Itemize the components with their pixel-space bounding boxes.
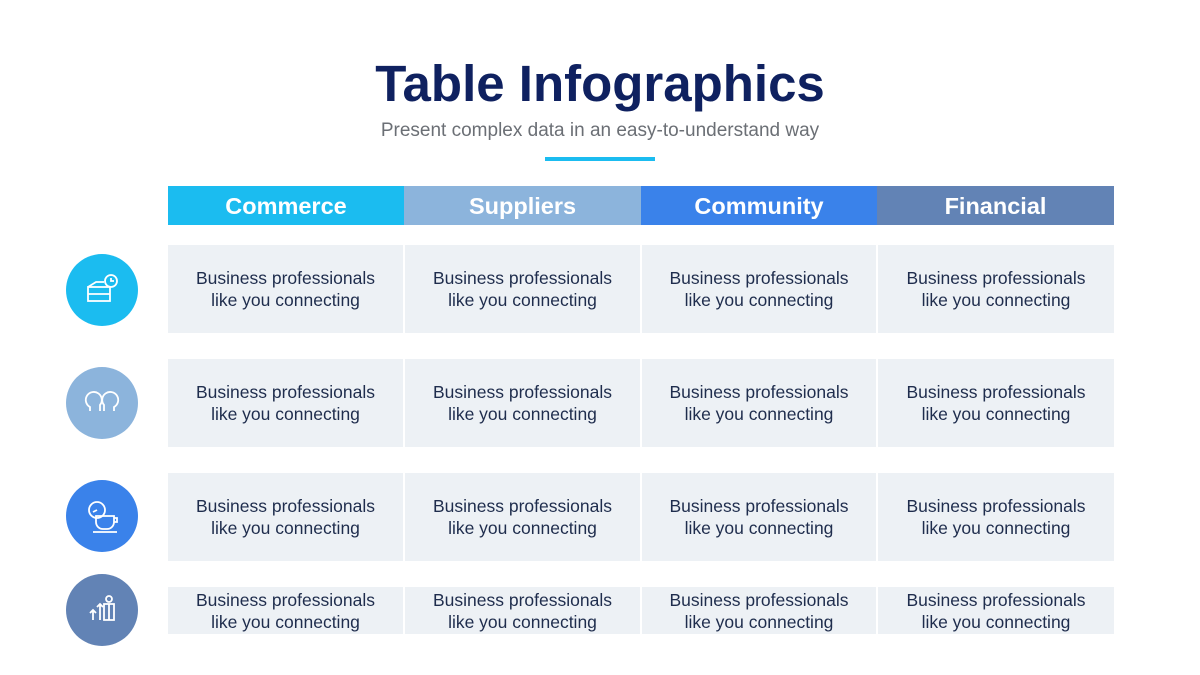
row 2: like you connecting bbox=[448, 404, 597, 424]
row 4: Business professionals bbox=[433, 590, 612, 610]
row 1: Business professionals bbox=[906, 268, 1085, 288]
row 4: like you connecting bbox=[211, 612, 360, 632]
row 2: like you connecting bbox=[685, 404, 833, 424]
header: Financial: Financial bbox=[945, 193, 1046, 219]
row 4: Business professionals bbox=[196, 590, 375, 610]
row 1: like you connecting bbox=[685, 290, 833, 310]
row 1: like you connecting bbox=[448, 290, 597, 310]
row 1: Business professionals bbox=[196, 268, 375, 288]
row 3: like you connecting bbox=[922, 518, 1070, 538]
row 2: like you connecting bbox=[211, 404, 360, 424]
title: Table Infographics bbox=[375, 55, 825, 112]
row 1: Business professionals bbox=[433, 268, 612, 288]
row 3 bbox=[168, 473, 1114, 561]
header: Commerce: Commerce bbox=[225, 193, 347, 219]
header: Suppliers: Suppliers bbox=[469, 193, 576, 219]
row 1: like you connecting bbox=[211, 290, 360, 310]
row 3: Business professionals bbox=[670, 496, 848, 516]
icon: person with growth arrows bbox=[66, 574, 138, 646]
accent underline bbox=[545, 157, 655, 161]
header: Financial bbox=[877, 186, 1114, 225]
header: Community: Community bbox=[694, 193, 824, 219]
row 4: like you connecting bbox=[685, 612, 833, 632]
row 3: like you connecting bbox=[211, 518, 360, 538]
header: Suppliers bbox=[404, 186, 641, 225]
row 1 bbox=[168, 245, 1114, 333]
row 2: Business professionals bbox=[196, 382, 375, 402]
row 3: Business professionals bbox=[196, 496, 375, 516]
row 3: like you connecting bbox=[448, 518, 597, 538]
row 4: like you connecting bbox=[922, 612, 1070, 632]
icon: heads bbox=[66, 367, 138, 439]
row 4 bbox=[168, 587, 1114, 634]
row 2: like you connecting bbox=[922, 404, 1070, 424]
row 3: Business professionals bbox=[906, 496, 1085, 516]
row 1: like you connecting bbox=[922, 290, 1070, 310]
icon: coffee and clock bbox=[66, 480, 138, 552]
row 3: Business professionals bbox=[433, 496, 612, 516]
row 3: like you connecting bbox=[685, 518, 833, 538]
row 2 bbox=[168, 359, 1114, 447]
header: Commerce bbox=[168, 186, 404, 225]
header: Community bbox=[641, 186, 877, 225]
row 2: Business professionals bbox=[670, 382, 848, 402]
row 2: Business professionals bbox=[906, 382, 1085, 402]
row 1: Business professionals bbox=[670, 268, 848, 288]
row 4: Business professionals bbox=[670, 590, 848, 610]
row 2: Business professionals bbox=[433, 382, 612, 402]
row 4: Business professionals bbox=[906, 590, 1085, 610]
subtitle: Present complex data in an easy-to-understand way bbox=[381, 120, 819, 141]
row 4: like you connecting bbox=[448, 612, 597, 632]
icon: cake with clock bbox=[66, 254, 138, 326]
